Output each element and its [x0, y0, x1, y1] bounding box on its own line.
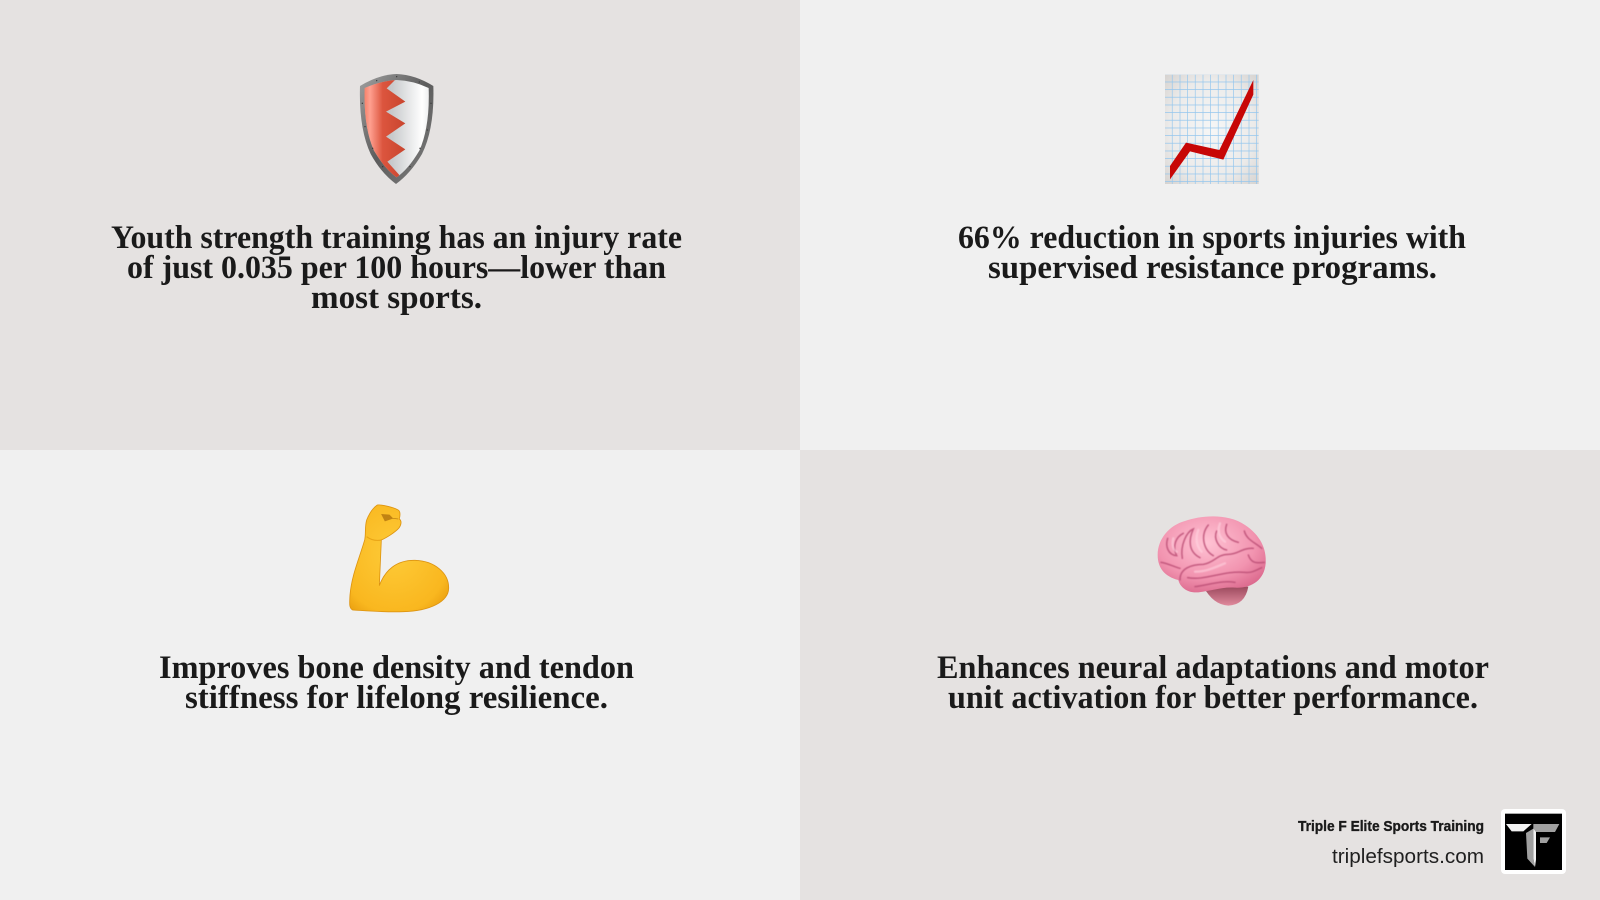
text: injury rate: most sports. — [311, 280, 482, 316]
text: injury rate: of just 0.035 per 100 hours—lower than — [127, 250, 666, 286]
text: bone density: Improves bone density and tendon — [159, 650, 634, 686]
text: neural adaptations: unit activation for better performance. — [948, 680, 1478, 716]
icon: shield — [360, 74, 434, 184]
panel: neural adaptations — [800, 450, 1600, 900]
brand text: triplefsports.com — [1332, 846, 1484, 868]
text: injury reduction: supervised resistance programs. — [988, 250, 1437, 286]
icon: brain — [1158, 516, 1266, 606]
text: bone density — [159, 650, 634, 716]
brand footer — [1298, 809, 1566, 874]
text: neural adaptations: Enhances neural adaptations and motor — [937, 650, 1489, 686]
text: injury rate — [111, 220, 682, 316]
panel: injury reduction — [800, 0, 1600, 450]
text: injury reduction — [958, 220, 1466, 286]
icon: flexed biceps — [349, 504, 450, 612]
text: injury rate: Youth strength training has an injury rate — [111, 220, 682, 256]
text: bone density: stiffness for lifelong resilience. — [185, 680, 608, 716]
text: neural adaptations — [937, 650, 1489, 716]
icon: rising chart — [1165, 74, 1259, 184]
brand text: Triple F Elite Sports Training — [1298, 819, 1484, 835]
panel: bone density — [0, 450, 800, 900]
brand text — [1298, 819, 1484, 868]
panel: injury rate — [0, 0, 800, 450]
text: injury reduction: 66% reduction in sports injuries with — [958, 220, 1466, 256]
icon: logo — [1501, 809, 1566, 874]
